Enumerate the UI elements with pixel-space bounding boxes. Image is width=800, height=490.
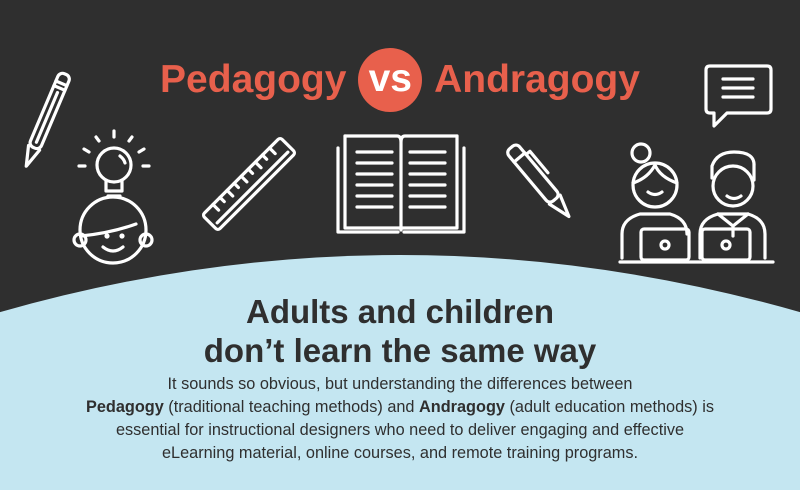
body text: essential for instructional designers who need to deliver engaging and effective: [116, 421, 684, 439]
body text: [86, 375, 714, 462]
title: vs: [369, 57, 412, 100]
heading: don’t learn the same way: [204, 332, 596, 369]
icons: [24, 64, 775, 265]
icon: lightbulb child: [74, 131, 152, 263]
body text: eLearning material, online courses, and remote training programs.: [162, 444, 638, 462]
heading: [204, 293, 596, 369]
title: Pedagogy: [160, 58, 346, 101]
icon: pen: [506, 140, 578, 221]
body text: Pedagogy (traditional teaching methods) and Andragogy (adult education methods) is: [86, 398, 714, 416]
icon: speech bubble: [706, 66, 771, 126]
title: [160, 48, 640, 112]
icon: people with laptops: [620, 144, 773, 262]
icon: pencil: [21, 72, 71, 169]
title: Andragogy: [434, 58, 640, 101]
body text: It sounds so obvious, but understanding the differences between: [168, 375, 632, 393]
heading: Adults and children: [246, 293, 554, 330]
icon: book: [338, 136, 464, 232]
icon: ruler: [202, 137, 296, 231]
